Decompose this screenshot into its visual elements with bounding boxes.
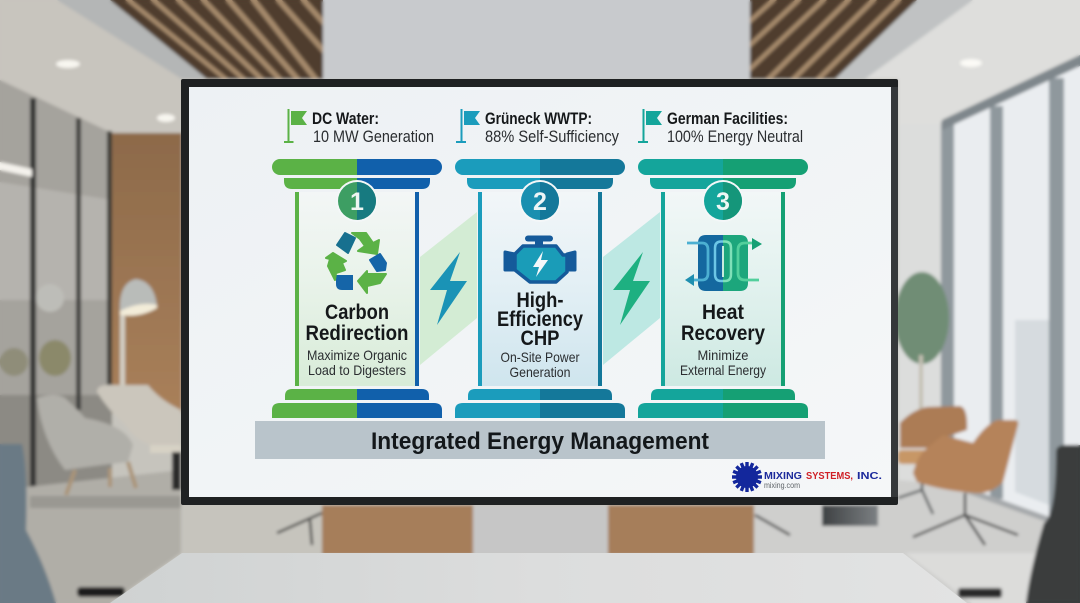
pillar heading: Recovery bbox=[681, 321, 765, 345]
phone on table left bbox=[77, 587, 125, 597]
wooden ceiling slats left bbox=[110, 0, 323, 79]
potted plant bbox=[895, 272, 949, 410]
company name: SYSTEMS, bbox=[806, 470, 853, 482]
number badge 2 bbox=[519, 180, 561, 222]
ceiling light right bbox=[960, 59, 982, 67]
pillar 1: Carbon Redirection bbox=[272, 159, 442, 418]
number badge 3: 3 bbox=[716, 188, 730, 216]
floor right bbox=[754, 480, 1080, 603]
pillar description: Load to Digesters bbox=[308, 362, 406, 378]
number badge 2: 2 bbox=[533, 188, 547, 216]
icon: heat exchanger bbox=[685, 235, 762, 291]
pillar heading: High- bbox=[516, 289, 564, 312]
pillar description: Generation bbox=[510, 364, 570, 380]
stat heading: Grüneck WWTP: bbox=[485, 109, 592, 128]
tan chairs bbox=[898, 406, 1018, 545]
company name: MIXING bbox=[764, 470, 802, 482]
pillar heading: Efficiency bbox=[497, 308, 583, 331]
foundation banner bbox=[255, 421, 825, 459]
pillar description bbox=[500, 349, 580, 380]
icon: blue flag bbox=[456, 109, 480, 143]
front chair left bbox=[0, 444, 56, 603]
center wall bbox=[323, 0, 750, 80]
icon: engine bbox=[505, 236, 575, 282]
conference table bbox=[110, 553, 967, 603]
connector band 1 bbox=[420, 212, 477, 365]
icon: green flag bbox=[284, 109, 307, 143]
icon: recycling arrows bbox=[326, 233, 386, 293]
wooden wall bbox=[112, 133, 182, 413]
number badge 1 bbox=[336, 180, 378, 222]
icon: gear bbox=[732, 462, 762, 492]
ceiling lights left bbox=[56, 60, 175, 122]
pillar heading bbox=[681, 300, 765, 345]
wooden ceiling slats right bbox=[750, 0, 917, 79]
glass wall left bbox=[0, 80, 112, 495]
connector band 2 bbox=[603, 212, 660, 365]
pillar heading bbox=[497, 289, 583, 350]
stat value: 10 MW Generation bbox=[313, 128, 434, 146]
company name: INC. bbox=[857, 470, 882, 482]
screen panel bbox=[189, 87, 891, 497]
pillar description bbox=[307, 347, 407, 378]
floor left bbox=[0, 470, 181, 603]
pillar 3: Heat Recovery bbox=[638, 159, 808, 418]
floor lamp bbox=[120, 279, 157, 388]
stat value: 100% Energy Neutral bbox=[667, 128, 803, 146]
lounge chairs left bbox=[37, 385, 181, 495]
icon: lightning bolt blue bbox=[430, 252, 467, 325]
pillar heading: Heat bbox=[702, 300, 744, 324]
stat: Grüneck WWTP bbox=[456, 109, 620, 146]
monitor stand leg left bbox=[277, 513, 322, 545]
number badge 1: 1 bbox=[350, 188, 364, 216]
pillar 2: High-Efficiency CHP bbox=[455, 159, 625, 418]
infographic content bbox=[255, 109, 882, 492]
stat: DC Water bbox=[284, 109, 434, 146]
website: mixing.com bbox=[764, 481, 800, 490]
foundation banner: Integrated Energy Management bbox=[371, 428, 709, 455]
right white wall bbox=[898, 125, 944, 485]
stat: German Facilities bbox=[638, 109, 803, 146]
pillar heading: CHP bbox=[520, 327, 560, 350]
pillar heading bbox=[306, 300, 408, 345]
company name bbox=[764, 470, 882, 482]
icon: lightning bolt green bbox=[613, 252, 650, 325]
pillar description: On-Site Power bbox=[500, 349, 580, 365]
monitor stand base bbox=[822, 505, 878, 526]
pillar description: Maximize Organic bbox=[307, 347, 407, 363]
windows right bbox=[941, 55, 1080, 534]
stat heading: DC Water: bbox=[312, 109, 379, 128]
logo: Mixing Systems bbox=[732, 462, 882, 492]
stat heading: German Facilities: bbox=[667, 109, 788, 128]
pillar heading: Carbon bbox=[325, 300, 389, 324]
pillar description bbox=[680, 347, 766, 378]
pillar description: External Energy bbox=[680, 362, 766, 378]
dark chair right bbox=[1026, 445, 1080, 603]
left ceiling bbox=[0, 0, 215, 133]
icon: teal flag bbox=[638, 109, 662, 143]
phone on table right bbox=[958, 588, 1002, 598]
right ceiling bbox=[750, 0, 1080, 125]
pillar heading: Redirection bbox=[306, 321, 408, 345]
wood panels under monitor bbox=[322, 505, 754, 555]
stat value: 88% Self-Sufficiency bbox=[485, 128, 620, 146]
monitor frame bbox=[181, 79, 898, 505]
pillar description: Minimize bbox=[698, 347, 749, 363]
number badge 3 bbox=[702, 180, 744, 222]
